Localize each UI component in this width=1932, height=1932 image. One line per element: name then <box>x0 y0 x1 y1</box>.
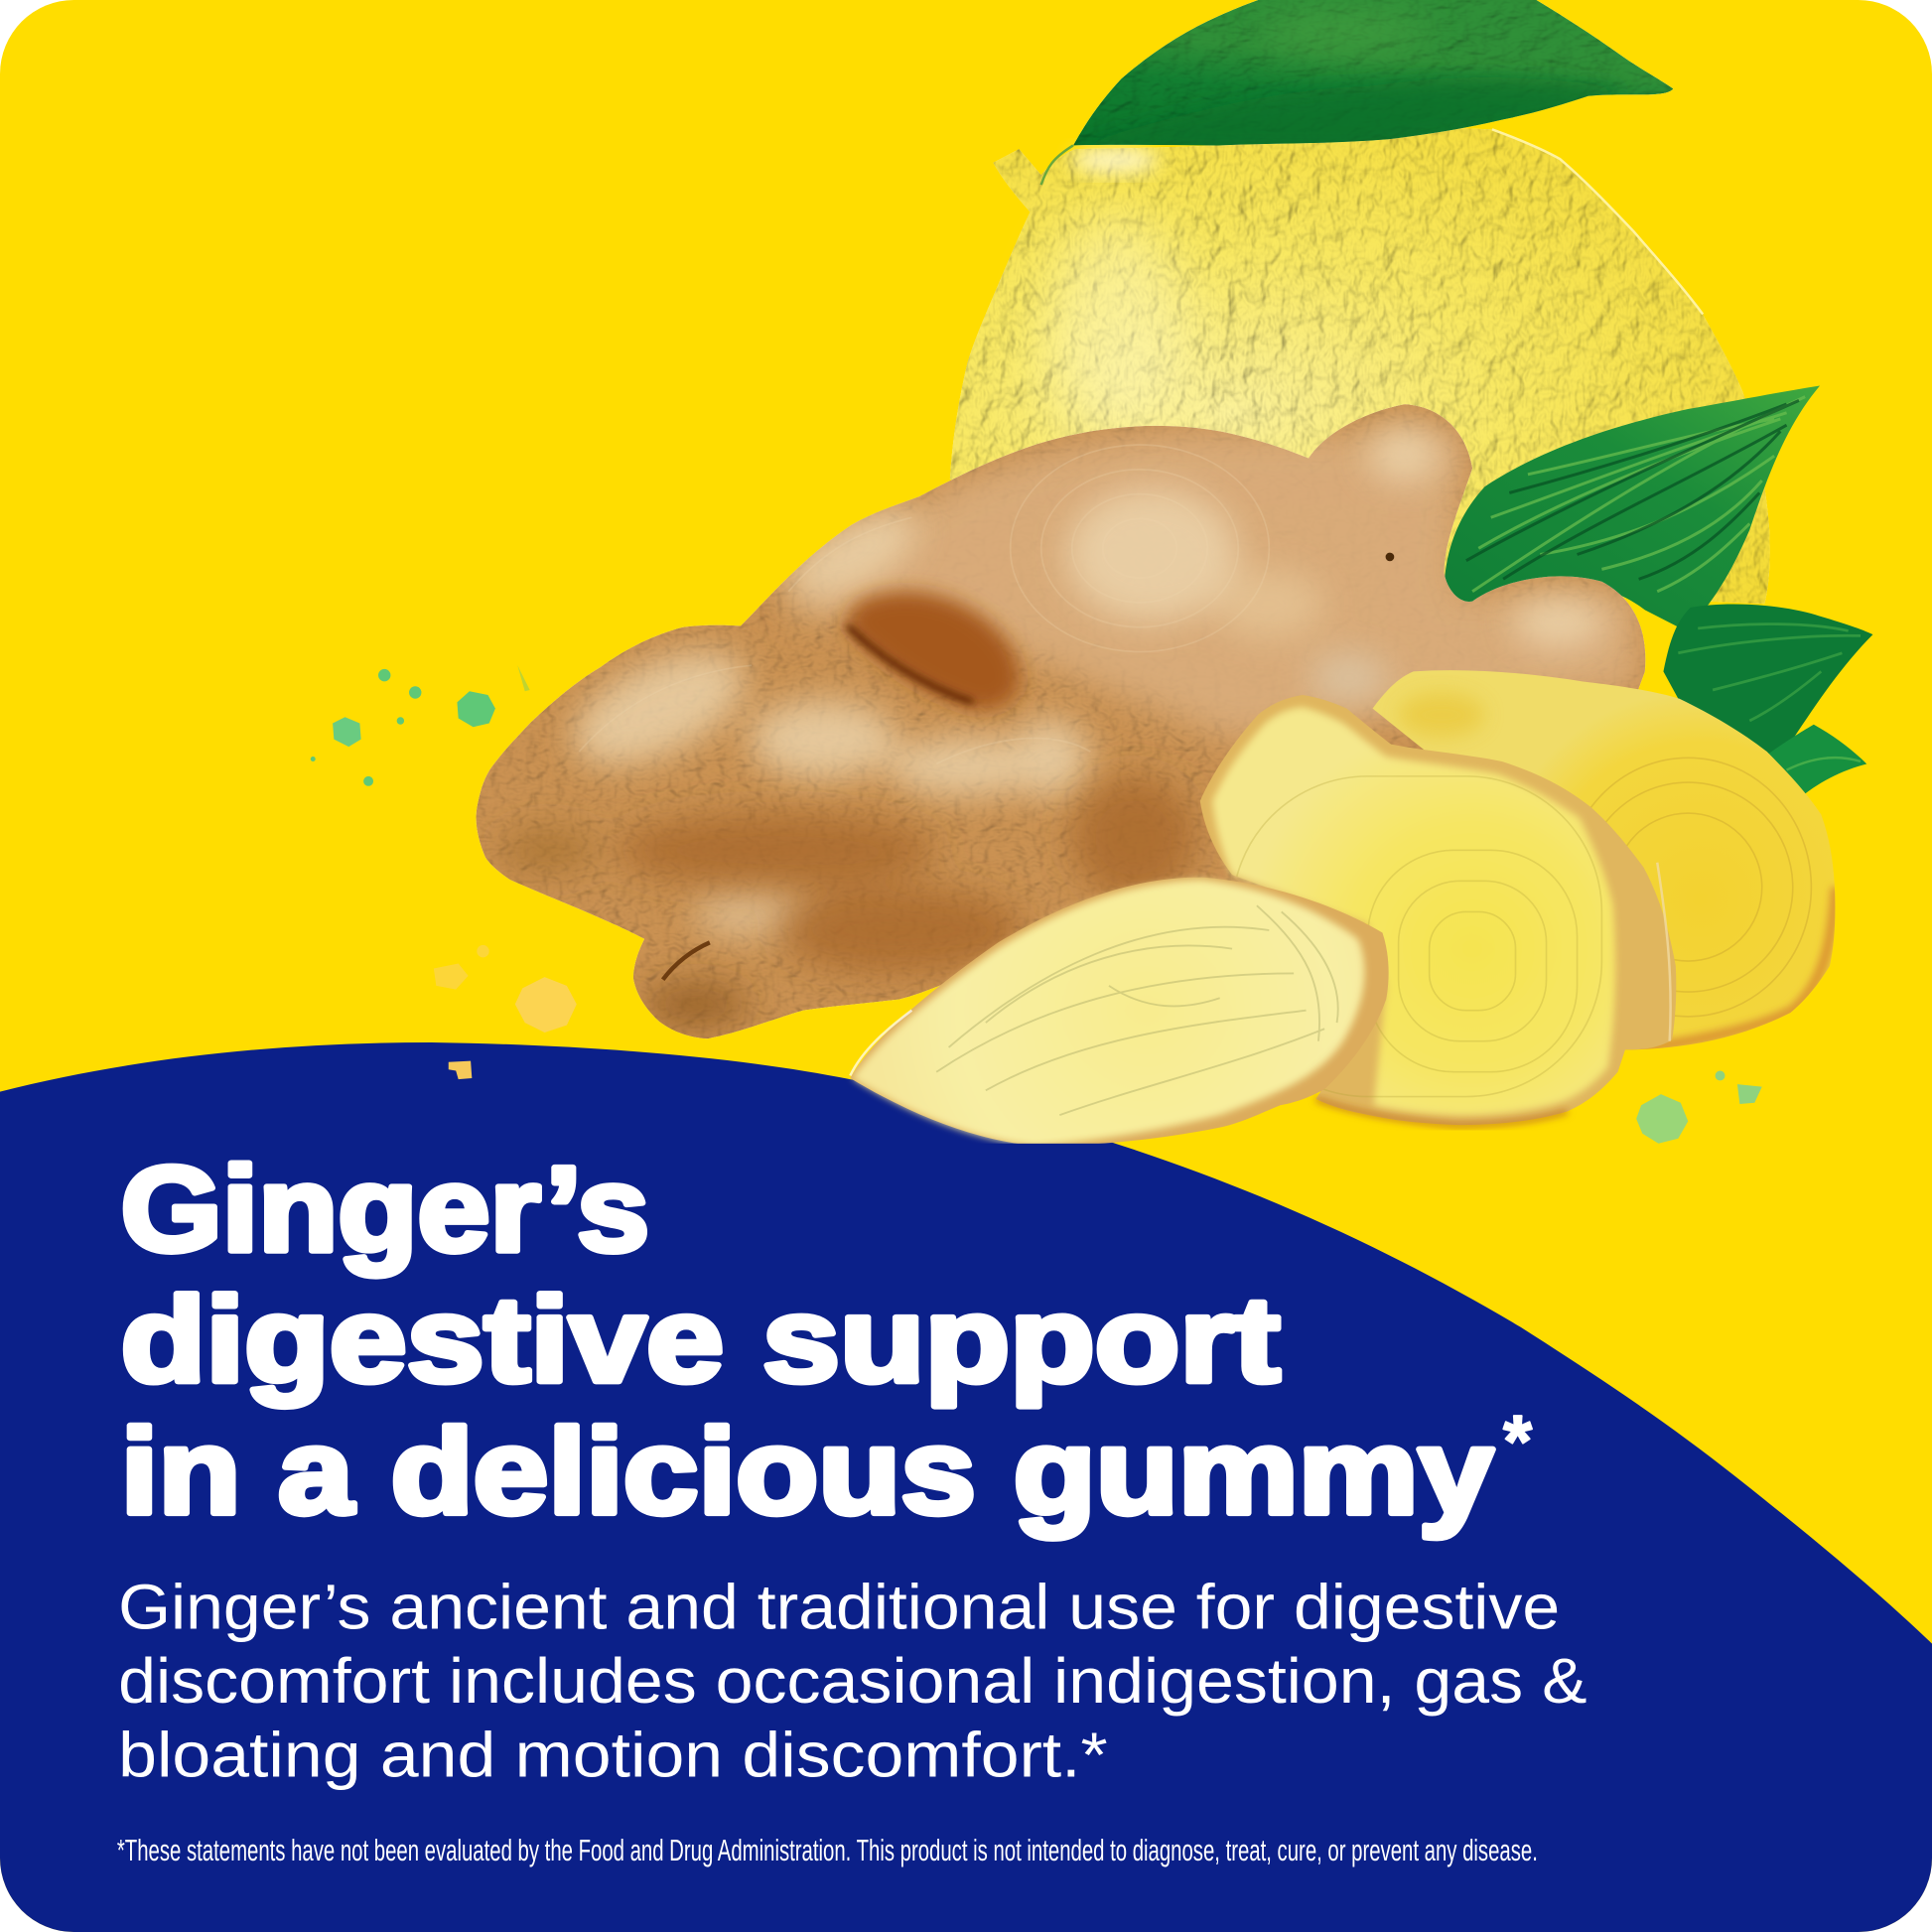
paint speck on wave <box>449 1061 472 1079</box>
body copy: discomfort includes occasional indigestion, gas & <box>118 1645 1587 1717</box>
ginger fine grain lines <box>579 445 1269 763</box>
ginger slice middle <box>1200 695 1676 1125</box>
paint splatter: orange left <box>434 945 577 1033</box>
ginger groove <box>844 592 1020 709</box>
body copy: bloating and motion discomfort.* <box>118 1720 1108 1791</box>
heading <box>121 1142 1532 1539</box>
lemon <box>950 128 1770 604</box>
leaf top <box>1041 0 1673 185</box>
paint splatter: green right <box>1636 1070 1762 1144</box>
paint splatter: green left <box>311 665 530 786</box>
heading line 1: Ginger’s <box>121 1142 649 1277</box>
leaf right large <box>1445 385 1820 630</box>
navy wave panel <box>0 1042 1932 1932</box>
ginger upper tone <box>788 430 1639 740</box>
leaf right middle <box>1663 604 1872 761</box>
heading: * <box>1503 1400 1532 1482</box>
leaf right small <box>1768 725 1866 801</box>
ginger highlights <box>557 424 1605 939</box>
ginger slice front <box>850 878 1389 1146</box>
body copy <box>118 1572 1587 1791</box>
heading: in a delicious gummy <box>121 1404 1493 1539</box>
ginger root <box>477 404 1645 1038</box>
illustration: lemon, ginger and leaves <box>477 0 1872 1146</box>
heading: digestive support <box>121 1272 1280 1407</box>
body line 1: Ginger’s ancient and traditional use for digestive <box>118 1572 1560 1643</box>
ginger slice back <box>1373 670 1836 1049</box>
ginger shadows <box>499 776 1195 1027</box>
